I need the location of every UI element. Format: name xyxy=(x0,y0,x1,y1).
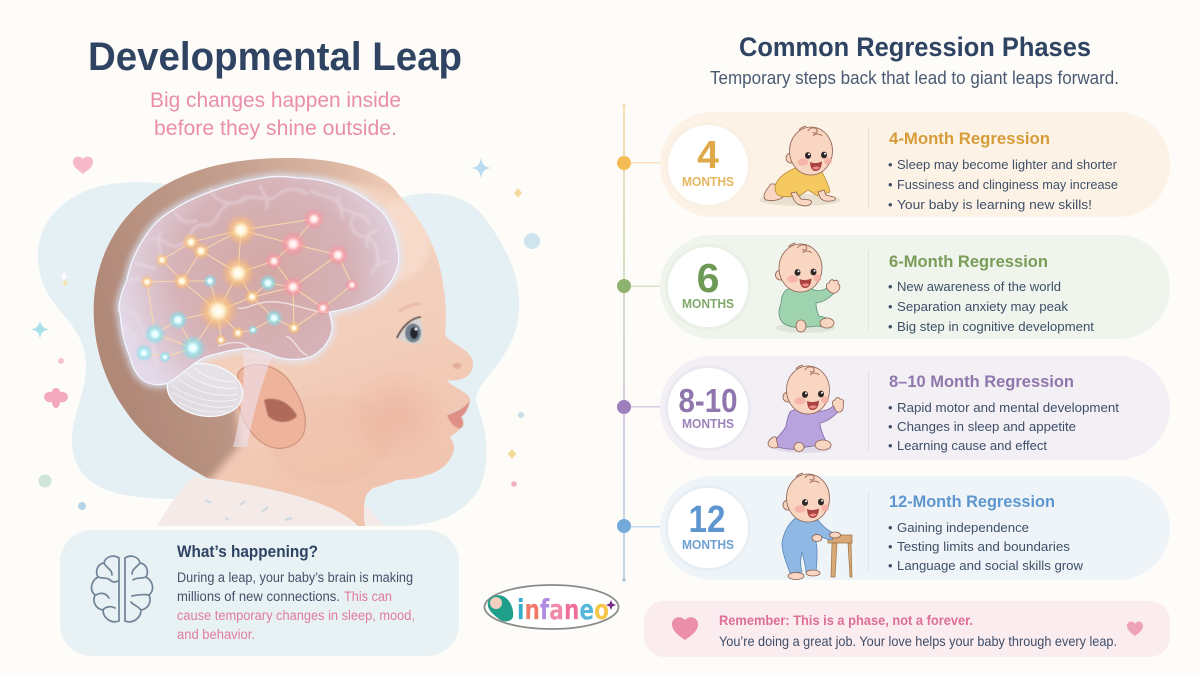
panel: 12-month regression xyxy=(660,473,1170,580)
neural connections xyxy=(144,219,352,357)
regression text xyxy=(888,372,1119,453)
age badge xyxy=(665,244,751,330)
subtitle xyxy=(150,88,401,140)
regression text: Separation anxiety may peak xyxy=(897,299,1069,314)
regression text: • xyxy=(888,520,893,535)
baby clothing xyxy=(157,477,384,526)
regression text: 4-Month Regression xyxy=(889,129,1050,148)
regression text: • xyxy=(888,438,893,453)
baby ear xyxy=(238,365,305,448)
baby sitting and waving xyxy=(775,243,840,333)
panel body text: During a leap, your baby’s brain is making xyxy=(177,570,413,585)
regression text: • xyxy=(888,197,893,212)
panel body text: cause temporary changes in sleep, mood, xyxy=(177,608,415,623)
regression text: • xyxy=(888,299,893,314)
regression text: Learning cause and effect xyxy=(897,438,1047,453)
divider xyxy=(868,371,869,451)
logo: infaneo: infaneo xyxy=(517,593,609,626)
icon: large heart xyxy=(672,617,698,640)
subtitle: before they shine outside. xyxy=(154,116,397,140)
neuron glow nodes xyxy=(135,208,359,363)
regression text: • xyxy=(888,539,893,554)
panel body text: This can xyxy=(344,589,392,604)
regression text xyxy=(888,492,1084,573)
age badge: 8-10 xyxy=(678,382,738,419)
regression text: 6-Month Regression xyxy=(889,252,1048,271)
age badge: MONTHS xyxy=(682,175,734,189)
regression text: Gaining independence xyxy=(897,520,1029,535)
icon: small heart xyxy=(1127,622,1143,636)
panel: what's happening xyxy=(60,530,459,656)
panel: 6-month regression xyxy=(660,235,1170,339)
regression text: Big step in cognitive development xyxy=(897,319,1094,334)
regression text: Language and social skills grow xyxy=(897,558,1084,573)
callout body: You’re doing a great job. Your love helps your baby through every leap. xyxy=(719,633,1117,649)
regression text: Rapid motor and mental development xyxy=(897,400,1119,415)
regression text: • xyxy=(888,419,893,434)
baby head xyxy=(80,144,473,526)
illustration: decorative sparkles xyxy=(31,157,540,510)
regression text xyxy=(888,129,1118,212)
subtitle: Big changes happen inside xyxy=(150,88,401,112)
brain glow xyxy=(119,176,399,385)
regression text xyxy=(888,252,1094,334)
panel: 4-month regression xyxy=(660,112,1170,217)
regression text: Your baby is learning new skills! xyxy=(897,197,1092,212)
baby eye xyxy=(397,304,423,344)
panel body text xyxy=(177,570,415,642)
illustration: background blob xyxy=(38,182,519,526)
icon: brain outline xyxy=(91,556,153,622)
age badge: MONTHS xyxy=(682,538,734,552)
divider xyxy=(868,250,869,330)
panel heading: What’s happening? xyxy=(177,543,318,561)
regression text: • xyxy=(888,157,893,172)
timeline xyxy=(617,104,661,582)
logo: infaneo xyxy=(484,585,618,629)
logo baby icon xyxy=(488,595,513,621)
right subheading: Temporary steps back that lead to giant leaps forward. xyxy=(710,68,1119,88)
age badge xyxy=(665,122,751,208)
illustration: baby profile with glowing brain xyxy=(80,144,473,526)
right heading: Common Regression Phases xyxy=(739,32,1091,62)
regression text: 8–10 Month Regression xyxy=(889,372,1074,391)
regression text: • xyxy=(888,558,893,573)
panel body text: millions of new connections. xyxy=(177,589,340,604)
regression text: Changes in sleep and appetite xyxy=(897,419,1076,434)
baby crawling xyxy=(759,126,841,206)
baby standing at stool xyxy=(782,473,852,580)
baby reaching xyxy=(768,365,844,453)
regression text: Fussiness and clinginess may increase xyxy=(897,177,1118,192)
age badge: MONTHS xyxy=(682,297,734,311)
age badge: MONTHS xyxy=(682,417,734,431)
regression text: • xyxy=(888,400,893,415)
regression text: Sleep may become lighter and shorter xyxy=(897,157,1118,172)
age badge: 6 xyxy=(697,255,719,301)
baby lips xyxy=(447,400,470,428)
panel: 8-10 month regression xyxy=(660,356,1170,460)
age badge xyxy=(665,485,751,571)
divider xyxy=(868,128,869,208)
title: Developmental Leap xyxy=(88,35,462,79)
callout: remember xyxy=(644,601,1170,657)
age badge xyxy=(665,365,751,451)
age badge: 4 xyxy=(697,134,719,177)
age badge: 12 xyxy=(688,499,726,541)
panel body text: and behavior. xyxy=(177,627,255,642)
regression text: • xyxy=(888,177,893,192)
divider xyxy=(868,491,869,571)
regression text: • xyxy=(888,319,893,334)
baby nose shading xyxy=(452,363,462,369)
regression text: Testing limits and boundaries xyxy=(897,539,1071,554)
callout heading: Remember: This is a phase, not a forever. xyxy=(719,612,973,628)
brain xyxy=(119,176,399,447)
regression text: 12-Month Regression xyxy=(889,492,1055,511)
regression text: New awareness of the world xyxy=(897,279,1061,294)
regression text: • xyxy=(888,279,893,294)
